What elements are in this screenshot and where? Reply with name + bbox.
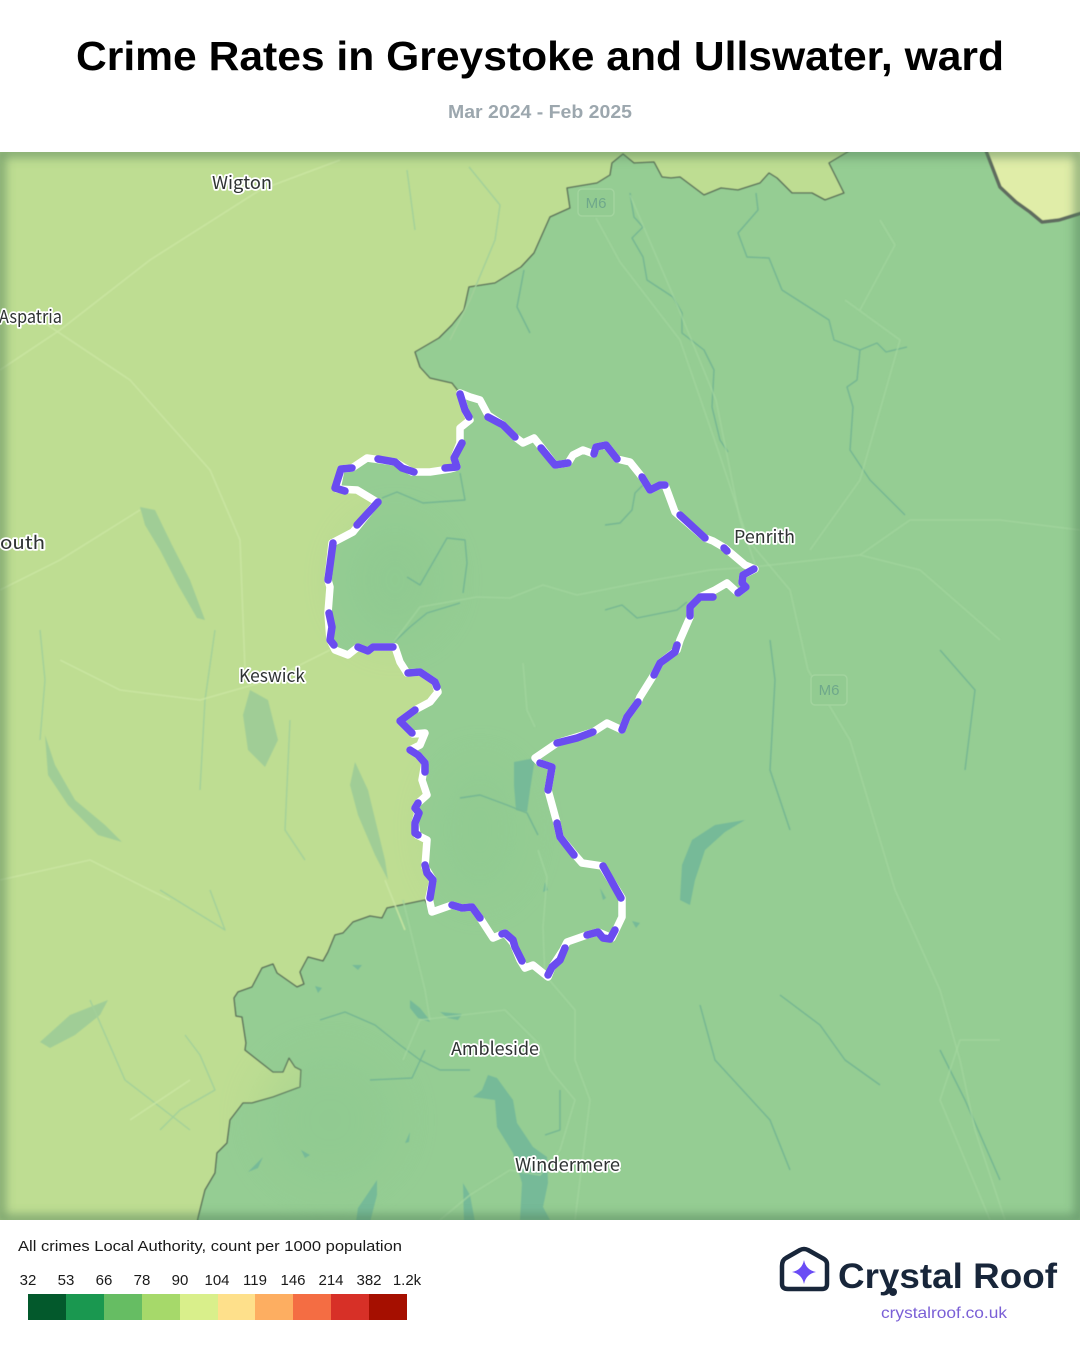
place label: Keswick: Keswick	[239, 662, 305, 688]
place label: Ambleside: Ambleside	[451, 1035, 539, 1061]
logo wordmark: Crystal Roof	[838, 1257, 1057, 1296]
place label: Wigton: Wigton	[212, 169, 272, 195]
terrain shading	[266, 1058, 302, 1099]
icon: M6 motorway sign north	[578, 189, 614, 216]
map region: lower-crime western authority	[0, 152, 847, 1220]
icon: M6 motorway sign south: M6	[819, 682, 839, 699]
map region: north-east lightest authority	[985, 148, 1080, 222]
place label: Penrith: Penrith	[734, 523, 795, 549]
icon: house with star	[782, 1249, 827, 1289]
legend tick labels: 146	[280, 1272, 306, 1289]
legend tick labels: 90	[172, 1272, 188, 1289]
legend colour scale	[28, 1294, 407, 1320]
legend tick labels: 1.2k	[393, 1272, 422, 1289]
ward outline purple dashes	[328, 394, 754, 975]
logo: Crystal Roof	[782, 1249, 1057, 1322]
logo y keyhole	[889, 1288, 897, 1296]
website link: crystalroof.co.uk	[881, 1305, 1008, 1322]
vignette	[0, 152, 1080, 1220]
subtitle: date range: Mar 2024 - Feb 2025	[448, 102, 632, 122]
legend tick labels: 53	[58, 1272, 74, 1289]
legend tick labels: 119	[243, 1272, 267, 1289]
icon: M6 motorway sign south	[811, 675, 847, 705]
place label: Cockermouth (cropped): outh	[0, 529, 45, 555]
place label: Windermere: Windermere	[515, 1151, 620, 1177]
ward outline white	[328, 393, 755, 977]
legend tick labels: 32	[20, 1272, 36, 1289]
legend tick labels: 214	[318, 1272, 344, 1289]
legend tick labels: 104	[204, 1272, 230, 1289]
map region: eastern authority with borders	[196, 150, 1080, 1230]
legend tick labels: 382	[356, 1272, 382, 1289]
rivers	[40, 167, 1000, 1180]
roads	[0, 160, 1080, 1220]
title: Crime Rates in Greystoke and Ullswater, ward	[76, 33, 1004, 79]
ward boundary: Greystoke and Ullswater	[328, 393, 755, 977]
place label: Aspatria: Aspatria	[0, 303, 62, 329]
icon: M6 motorway sign north: M6	[586, 195, 606, 212]
legend tick labels	[20, 1272, 422, 1289]
lakes	[40, 507, 745, 1222]
legend	[18, 1238, 422, 1320]
legend title: All crimes Local Authority, count per 1000 population	[18, 1238, 402, 1255]
legend tick labels: 78	[134, 1272, 150, 1289]
legend tick labels: 66	[96, 1272, 112, 1289]
